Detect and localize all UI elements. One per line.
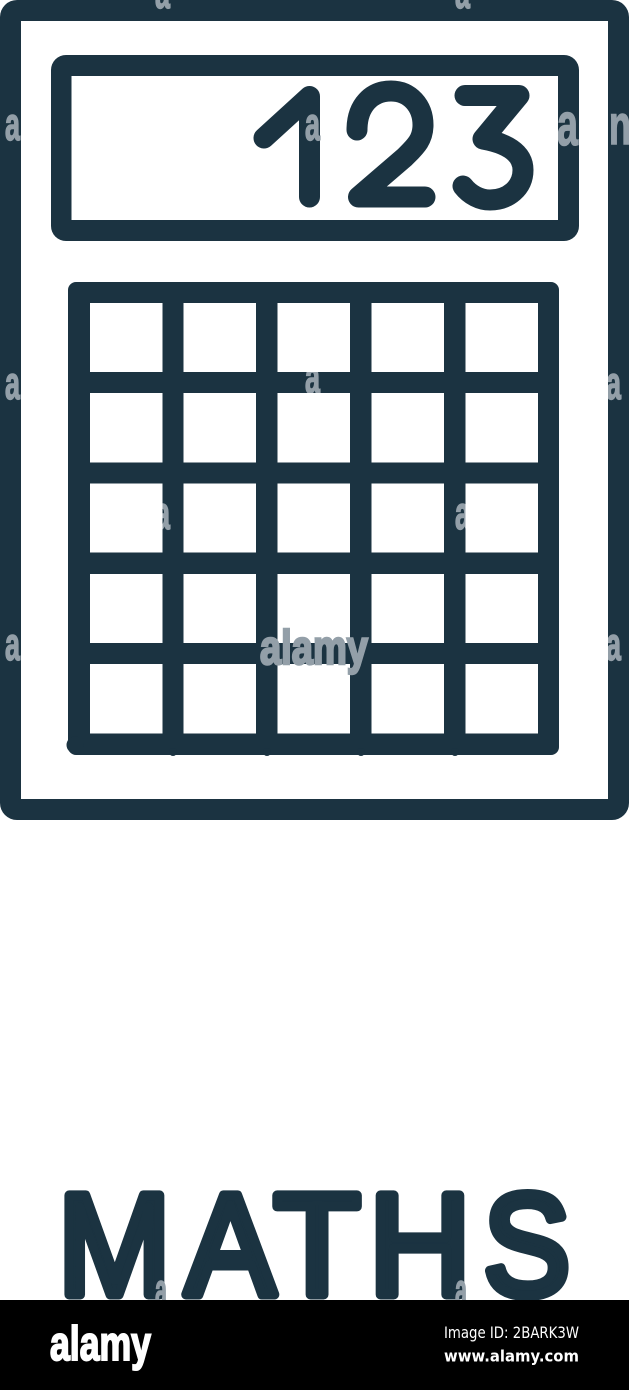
title: MATHS: T: [274, 1165, 360, 1326]
watermark letters on keypad: a: [455, 487, 470, 539]
alamy logo: alamy: [50, 1318, 151, 1371]
calculator body frame: [0, 0, 629, 820]
title: MATHS: H: [369, 1165, 471, 1326]
title: MATHS: [58, 1164, 570, 1326]
watermark letters on keypad: [155, 351, 470, 539]
watermark letters on frame: a: [5, 618, 20, 670]
title: MATHS: S: [484, 1165, 570, 1326]
footer bar: [0, 1300, 629, 1390]
calculator keypad: [66, 282, 559, 756]
image id: Image ID: 2BARK3W: [444, 1323, 579, 1342]
watermark letters on keypad: a: [305, 351, 320, 403]
central watermark: alamy: [260, 622, 368, 675]
title: MATHS: M: [58, 1164, 171, 1325]
display digits 123: [264, 91, 523, 200]
keypad keys: [90, 303, 538, 734]
watermark letters on title: [155, 1264, 467, 1316]
watermark letters on title: a: [155, 1264, 167, 1316]
watermark letters on frame: a: [5, 98, 20, 150]
watermark letters on frame: a: [5, 357, 20, 409]
watermark letter on display edge: a: [557, 91, 578, 158]
watermark letters on keypad: a: [155, 487, 170, 539]
icon: calculator: [0, 0, 629, 820]
website: www.alamy.com: [444, 1346, 579, 1366]
watermark letter on digit one: a: [305, 98, 320, 150]
watermark letters on frame: [5, 0, 629, 670]
infographic canvas: a: [455, 1264, 467, 1316]
title: MATHS: A: [186, 1165, 275, 1326]
calculator display: [51, 55, 579, 241]
